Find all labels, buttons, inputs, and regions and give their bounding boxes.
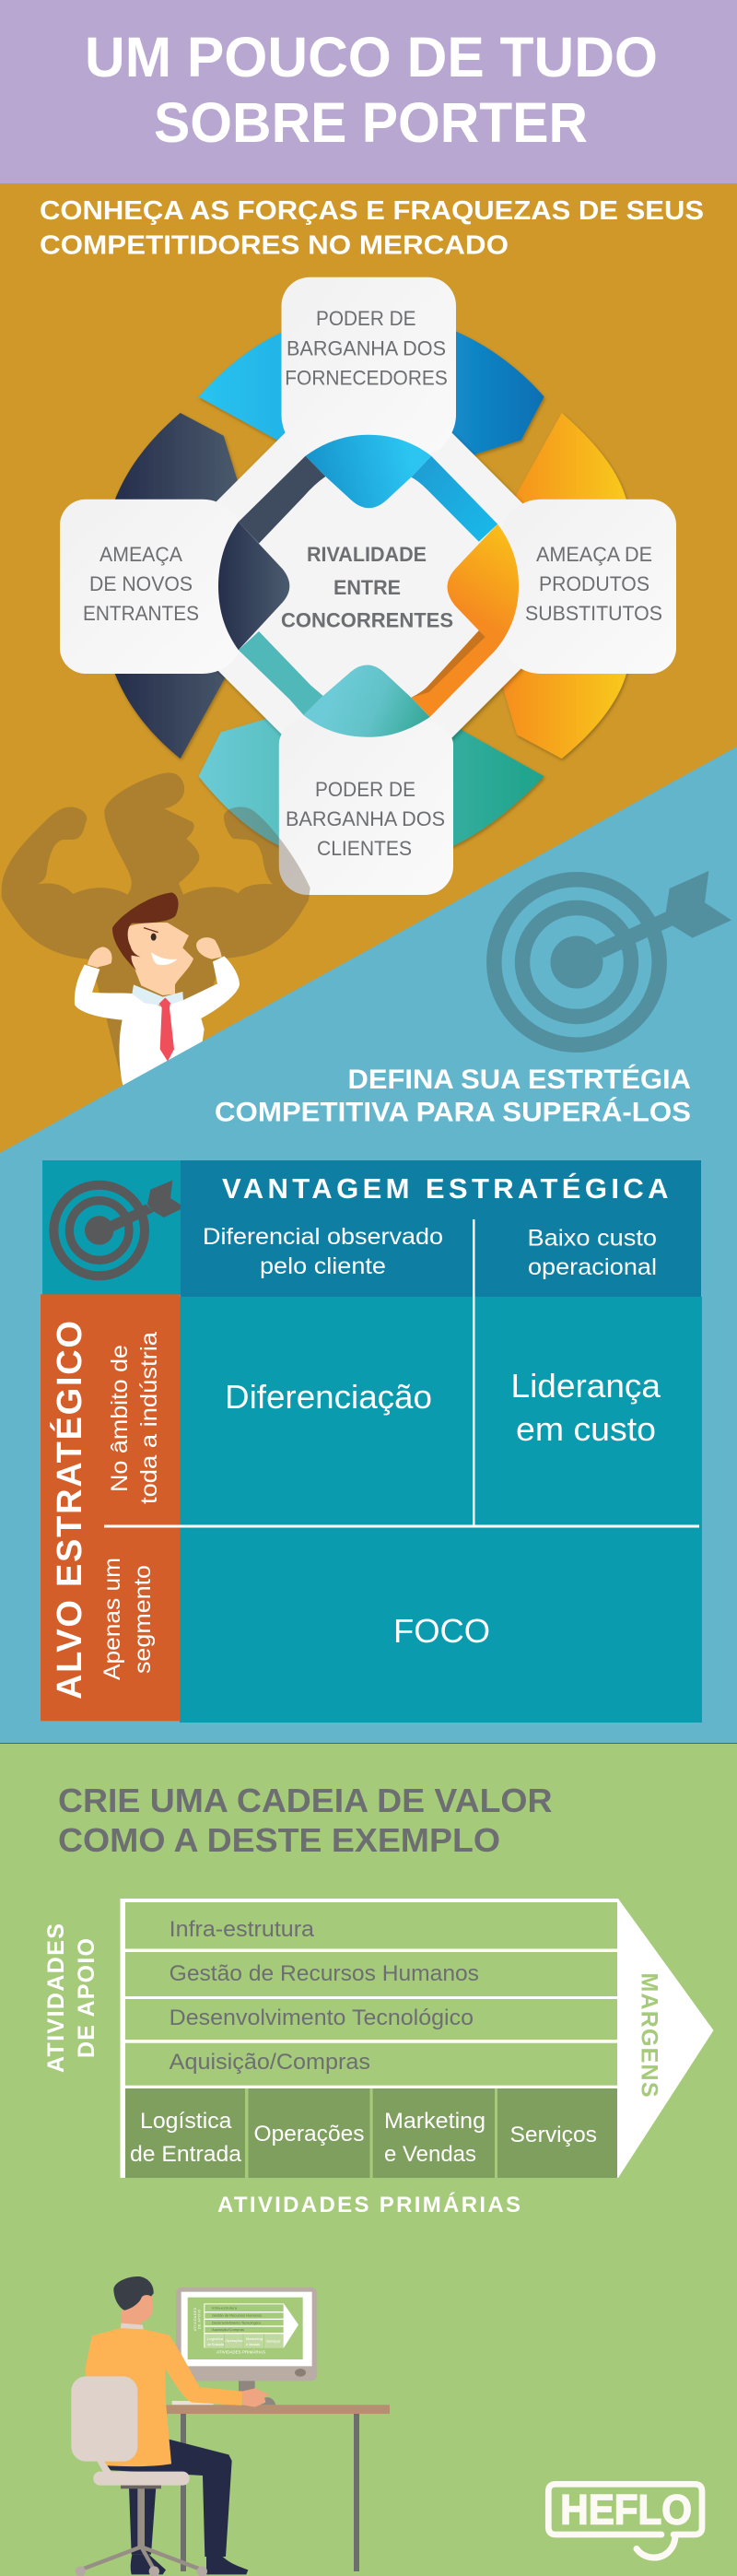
box: novos entrantes: DE NOVOS — [89, 572, 193, 595]
heading: estratégia competitiva: COMPETITIVA PARA SUPERÁ-LOS — [215, 1097, 691, 1128]
primary labels: e Vendas — [384, 2142, 476, 2167]
atividades de apoio label: ATIVIDADES — [43, 1923, 69, 2073]
hair — [113, 2276, 154, 2311]
hair — [112, 892, 179, 970]
primary labels: Serviços — [510, 2123, 597, 2147]
header row: Baixo custo — [527, 1226, 657, 1252]
sweater — [85, 2328, 242, 2466]
orange side column: No âmbito de — [107, 1345, 133, 1492]
five forces diagram — [60, 277, 676, 895]
box: clientes: CLIENTES — [317, 837, 412, 860]
mini chain frame — [204, 2303, 298, 2347]
primary labels — [130, 2109, 597, 2167]
corner cell with target icon — [42, 1160, 185, 1295]
mouse — [261, 2397, 275, 2405]
cell labels — [225, 1367, 661, 1650]
cell labels: Diferenciação — [225, 1378, 432, 1416]
box: fornecedores: FORNECEDORES — [285, 367, 448, 389]
keyboard — [172, 2401, 214, 2405]
heading: estratégia competitiva — [215, 1064, 691, 1128]
cell labels: FOCO — [393, 1612, 490, 1650]
orange side column: toda a indústria — [136, 1332, 162, 1504]
logo: HEFLO: HEFLO — [560, 2486, 692, 2533]
heading: estratégia competitiva: DEFINA SUA ESTRTÉGIA — [348, 1064, 691, 1095]
center label: CONCORRENTES — [281, 608, 453, 631]
support labels: Aquisição/Compras — [170, 2050, 370, 2075]
tie — [159, 997, 174, 1062]
box: clientes: PODER DE — [315, 778, 415, 801]
heading: cadeia de valor: CRIE UMA CADEIA DE VALOR — [58, 1782, 553, 1819]
hand — [242, 2388, 270, 2407]
support labels: Desenvolvimento Tecnológico — [170, 2006, 474, 2030]
illustration: man at computer: Operações — [225, 2338, 243, 2343]
strategy matrix panel — [41, 1160, 702, 1723]
orange side column: segmento — [130, 1565, 156, 1674]
illustration: man at computer: Serviços — [266, 2339, 280, 2343]
near leg and shoe — [104, 2440, 232, 2557]
monitor stand — [239, 2381, 255, 2395]
box: novos entrantes: AMEAÇA — [99, 543, 182, 566]
orange side column: Apenas um — [99, 1558, 125, 1680]
header row: operacional — [528, 1254, 657, 1280]
mini chain labels — [212, 2306, 262, 2332]
heading: forças e fraquezas: COMPETITIDORES NO MERCADO — [40, 230, 509, 260]
box: fornecedores — [282, 277, 456, 479]
outer petals — [111, 323, 630, 853]
illustration: man at computer: Logística — [207, 2336, 224, 2341]
box: fornecedores: BARGANHA DOS — [287, 337, 446, 360]
primary labels: Logística — [140, 2109, 232, 2134]
box: clientes: BARGANHA DOS — [286, 807, 445, 830]
mini chain labels: Aquisição/Compras — [212, 2327, 244, 2332]
muscle shadow silhouette — [2, 772, 310, 1085]
desk legs — [181, 2414, 186, 2571]
box: produtos substitutos: PRODUTOS — [539, 572, 649, 595]
center label: ENTRE — [333, 576, 401, 599]
arrow frame — [120, 1899, 713, 2178]
divider lines — [473, 1219, 475, 1526]
illustration: man at computer: ATIVIDADES — [193, 2307, 197, 2331]
icon: target with arrow — [494, 871, 731, 1045]
desk top — [165, 2405, 390, 2414]
support rows — [125, 1902, 617, 2086]
primary labels: Operações — [254, 2122, 365, 2147]
icon: strong businessman — [75, 892, 240, 1086]
heading: forças e fraquezas: CONHEÇA AS FORÇAS E FRAQUEZAS DE SEUS — [40, 196, 704, 226]
header row: Diferencial observado — [203, 1224, 443, 1250]
neck and ear — [121, 2295, 153, 2329]
box: novos entrantes: ENTRANTES — [83, 602, 199, 625]
white ring diamond — [133, 349, 604, 821]
header row: VANTAGEM ESTRATÉGICA — [222, 1172, 669, 1205]
mini chain labels: Infra-estrutura — [212, 2306, 238, 2311]
body background — [180, 1297, 702, 1723]
title: SOBRE PORTER — [154, 91, 588, 154]
heading: cadeia de valor: COMO A DESTE EXEMPLO — [58, 1821, 500, 1859]
title — [85, 26, 658, 154]
primary labels: de Entrada — [130, 2142, 242, 2167]
center label: RIVALIDADE — [307, 543, 427, 566]
illustration: man at computer — [71, 2276, 390, 2576]
primary cells — [125, 2088, 617, 2178]
illustration: man at computer: ATIVIDADES PRIMÁRIAS — [216, 2348, 265, 2354]
margens label: MARGENS — [636, 1972, 661, 2098]
title: UM POUCO DE TUDO — [85, 26, 658, 88]
background: blue diagonal section — [0, 747, 737, 1743]
chair — [96, 2459, 112, 2474]
face and neck — [126, 923, 193, 995]
orange side column: ALVO ESTRATÉGICO — [49, 1321, 89, 1700]
cell labels: Liderança — [510, 1367, 661, 1405]
atividades primarias label: ATIVIDADES PRIMÁRIAS — [217, 2192, 521, 2217]
collar — [132, 984, 183, 1006]
box: clientes — [279, 700, 453, 895]
orange side column — [41, 1294, 181, 1721]
atividades de apoio label: DE APOIO — [74, 1938, 99, 2058]
hands — [88, 947, 112, 968]
header row — [181, 1160, 701, 1297]
box: novos entrantes — [60, 500, 244, 674]
face details — [151, 934, 157, 941]
box: fornecedores: PODER DE — [316, 307, 416, 330]
heading: cadeia de valor — [58, 1782, 553, 1859]
support labels — [170, 1917, 479, 2075]
mini chain labels: Desenvolvimento Tecnológico — [212, 2320, 262, 2324]
background: green section — [0, 1744, 737, 2576]
shirt — [75, 956, 240, 1086]
cell labels: em custo — [516, 1410, 656, 1448]
support labels: Infra-estrutura — [170, 1917, 315, 1942]
center label — [281, 543, 453, 631]
heading: forças e fraquezas — [40, 196, 704, 260]
logo: HEFLO — [548, 2484, 702, 2558]
mini chain labels: Gestão de Recursos Humanos — [212, 2313, 262, 2318]
illustration: man at computer: de Entrada — [207, 2342, 225, 2347]
support labels: Gestão de Recursos Humanos — [170, 1961, 479, 1986]
header row: pelo cliente — [260, 1253, 386, 1279]
box: produtos substitutos: AMEAÇA DE — [536, 543, 652, 566]
illustration: man at computer: DE APOIO — [197, 2310, 201, 2329]
illustration: man at computer: e Vendas — [246, 2342, 260, 2347]
monitor — [176, 2288, 317, 2381]
box: produtos substitutos: SUBSTITUTOS — [525, 602, 662, 625]
illustration: man at computer: Marketing — [246, 2336, 263, 2341]
background: gold section — [0, 183, 737, 1160]
inner interlocking bands — [218, 435, 519, 737]
collar — [121, 2323, 144, 2329]
value chain diagram — [43, 1899, 713, 2217]
far leg and shoe — [129, 2487, 156, 2555]
box: produtos substitutos — [499, 500, 676, 674]
header banner — [0, 0, 737, 183]
primary labels: Marketing — [384, 2109, 485, 2134]
atividades de apoio label — [43, 1923, 99, 2073]
